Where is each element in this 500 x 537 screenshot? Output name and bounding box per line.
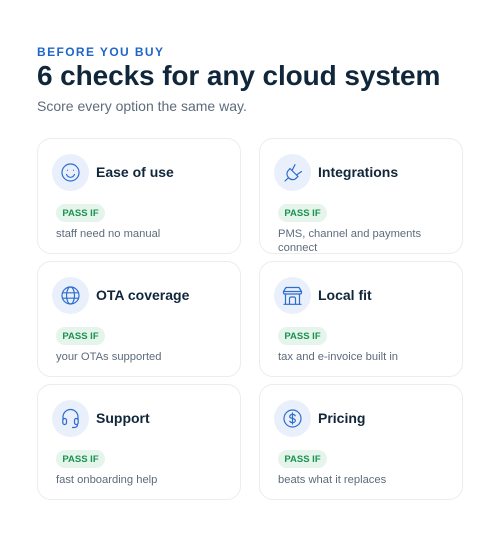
heading: local fit: Local fit bbox=[318, 287, 372, 303]
icon: headset bbox=[52, 400, 89, 437]
panel: local fit bbox=[259, 261, 463, 377]
badge: pass if: PASS IF bbox=[284, 454, 321, 465]
icon: dollar coin bbox=[274, 400, 311, 437]
heading: ease of use: Ease of use bbox=[96, 164, 174, 180]
text: pricing criterion: beats what it replaces bbox=[278, 474, 386, 486]
badge: pass if: PASS IF bbox=[284, 331, 321, 342]
icon: smiley face bbox=[52, 154, 89, 191]
text: support criterion: fast onboarding help bbox=[56, 474, 157, 486]
badge: pass if bbox=[278, 204, 327, 222]
text: OTA coverage criterion: your OTAs supported bbox=[56, 351, 162, 363]
heading: support: Support bbox=[96, 410, 150, 426]
badge: pass if bbox=[278, 450, 327, 468]
text: ease of use criterion: staff need no manual bbox=[56, 228, 160, 240]
panel: integrations bbox=[259, 138, 463, 254]
heading: integrations: Integrations bbox=[318, 164, 398, 180]
panel: pricing bbox=[259, 384, 463, 500]
icon: globe bbox=[52, 277, 89, 314]
eyebrow heading: BEFORE YOU BUY bbox=[37, 44, 164, 58]
panel: OTA coverage bbox=[37, 261, 241, 377]
icon: storefront bbox=[274, 277, 311, 314]
badge: pass if bbox=[56, 450, 105, 468]
badge: pass if: PASS IF bbox=[62, 208, 99, 219]
badge: pass if: PASS IF bbox=[62, 331, 99, 342]
heading: OTA coverage: OTA coverage bbox=[96, 287, 189, 303]
badge: pass if: PASS IF bbox=[62, 454, 99, 465]
badge: pass if bbox=[56, 327, 105, 345]
icon: plug bbox=[274, 154, 311, 191]
badge: pass if bbox=[278, 327, 327, 345]
heading: pricing: Pricing bbox=[318, 410, 365, 426]
badge: pass if: PASS IF bbox=[284, 208, 321, 219]
text: local fit criterion: tax and e-invoice built in bbox=[278, 351, 398, 363]
panel: ease of use bbox=[37, 138, 241, 254]
title: 6 checks for any cloud system bbox=[37, 60, 440, 91]
badge: pass if bbox=[56, 204, 105, 222]
panel: support bbox=[37, 384, 241, 500]
subtitle: Score every option the same way. bbox=[37, 98, 247, 114]
text: integrations criterion: PMS, channel and payments connect bbox=[278, 228, 421, 254]
